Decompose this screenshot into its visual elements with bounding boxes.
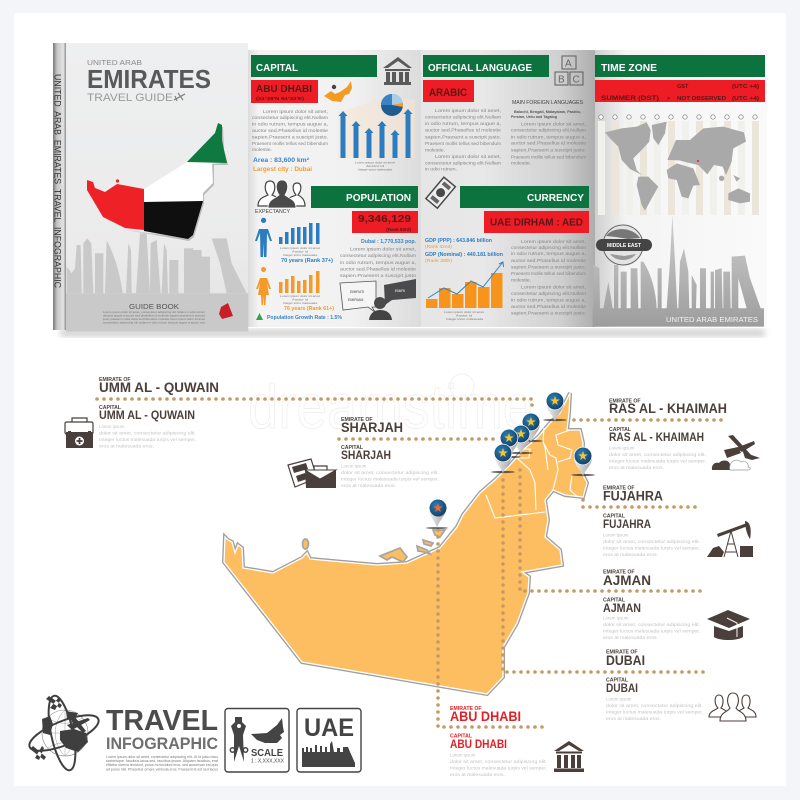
badge: scale: SCALE [251,748,283,759]
text block: capital description: sapien.Praesent a suscipit justo. [252,134,328,140]
book spine [53,43,66,330]
label: abu dhabi: CAPITAL [450,734,473,740]
text block: currency: sapien.Praesent a suscipit justo. [511,310,586,316]
text block: population: consectetur adipiscing elit.Nullam [340,253,416,258]
text block: currency: in odio rutrum, tempus augue a, [511,251,586,256]
cover guide book text: justo praesent mollis tellus sed bibendum molestie lorem ipsum dolor sit amet [102,317,205,321]
label: fujairah: FUJAHRA [603,519,651,531]
growth rate: Population Growth Rate : 1.5% [267,315,343,321]
callout: time zone table: NOT OBSERVED [677,96,726,102]
callout: time zone table: > [667,96,670,102]
label: umm al quwain: dolor sit amet, consectetur adipiscing elit. [99,430,196,436]
capital section [251,55,415,173]
pin: fujairah [571,447,595,476]
population section: POPULATION [346,193,411,204]
icon: alphabet blocks: C [572,74,580,86]
emirate borders [486,428,578,518]
gdp figures: (Rank 32nd) [425,244,452,249]
text block: capital description [252,109,328,152]
bar chart with pie: Auctor id [366,164,385,168]
label: ras al khaimah: RAS AL - KHAIMAH [609,432,704,444]
label: fujairah: FUJAHRA [603,488,663,504]
icon: newspaper and briefcase [288,459,336,488]
label: ras al khaimah: Integer luctus malesuada turpis vel semper, [609,458,706,464]
bar chart: male [279,223,320,244]
callout: time zone table: (UTC +4) [732,84,759,90]
icon: oil pump [707,521,753,557]
cover title [87,58,211,104]
label: dubai: DUBAI [606,683,638,695]
icon: group of people [258,180,305,208]
cover guide book text: tempus augue a auctor sed phasellus id molestie sapien praesent a suscipit [103,314,205,318]
title: travel infographic [106,705,218,772]
text block: population: Lorem ipsum dolor sit amet, [350,246,416,252]
area and largest city: Area : 83,600 km² [253,157,309,164]
cover guide book text: consectetur adipiscing elit nullam in odio rutrum tempus augue a auctor sed [103,320,205,324]
label: united arab emirates: UNITED ARAB EMIRATES [666,315,758,324]
map pins [426,392,595,529]
caption: female: Auctor id [292,298,309,302]
label: ajman: CAPITAL [603,598,626,604]
text block: population: auctor sed.Phasellus id molestie [340,266,416,272]
label: expectancy: EXPECTANCY [255,209,291,215]
label: umm al quwain: CAPITAL [99,405,122,411]
icon: alphabet blocks: B [558,74,565,86]
label: fujairah: Integer luctus malesuada turpis vel semper, [603,546,700,550]
label: fujairah: Lorem ipsum [603,532,629,538]
callout: dirham: UAE DIRHAM : AED [490,216,583,228]
label: ras al khaimah: eros at malesuada eros. [609,465,664,470]
icon: government building [383,57,412,85]
pin: ras al khaimah [543,392,567,421]
icon: speech bubbles with person: EMIRIAM [348,298,363,302]
callout: time zone table: SUMMER (DST) [601,95,659,102]
text block: currency: Praesent mollis tellus sed bibendum [511,271,586,276]
text block: population: in odio rutrum, tempus augue a, [340,260,416,265]
icon: people outline [709,693,756,721]
label: ajman: dolor sit amet, consectetur adipiscing elit. [603,622,700,627]
text block: language left: consectetur adipiscing elit.Nullam [425,114,501,120]
label: fujairah: CAPITAL [603,514,626,520]
chart: gdp growth [426,262,504,321]
text block: foreign languages: sapien.Praesent a suscipit justo. [511,148,586,152]
label: abu dhabi: Integer luctus malesuada turpis vel semper, [450,766,547,770]
title: travel infographic: scelerisque, faucibus lacus sed, faucibus ipsum. Aliquam faucibus, erat [106,759,218,763]
label: sharjah: SHARJAH [341,450,391,462]
time zone section [593,55,765,327]
label: sharjah: Integer luctus malesuada turpis vel semper, [341,476,439,482]
label: umm al quwain: UMM AL - QUWAIN [99,380,219,395]
bar chart with pie: Integer tortor malesuada [358,168,392,172]
currency section [425,177,589,321]
label: dubai: Integer luctus malesuada turpis vel semper, [606,710,703,714]
label: dubai [606,650,703,721]
icon: orange map [324,81,352,102]
caption: male: Lorem ipsum dolor sit amet [280,246,320,250]
badge: UAE: UAE [304,714,354,742]
icon: government building [554,741,584,772]
callout: population figure [352,211,418,233]
label: umm al quwain [99,377,219,448]
text block: language left: consectetur adipiscing elit.Nullam [425,160,501,166]
badge: middle east globe: MIDDLE EAST [607,243,641,249]
icon: alphabet blocks: A [565,58,572,70]
book shadow [60,329,765,337]
label: ras al khaimah: dolor sit amet, consectetur adipiscing elit. [609,452,706,457]
pin: abu dhabi [426,500,448,529]
title: travel infographic: TRAVEL [106,705,218,737]
label: dubai: eros at malesuada eros. [606,716,661,721]
official language section [423,55,586,172]
book cover [66,43,248,332]
text block: foreign languages: in odio rutrum, tempus augue a, [511,134,586,140]
bar chart with pie [338,94,415,172]
callout: abu dhabi: ABU DHABI [256,84,312,95]
label: abu dhabi: EMIRATE OF [450,706,482,712]
label: abu dhabi: eros at malesuada eros. [450,772,505,777]
label: umm al quwain: EMIRATE OF [99,377,131,383]
text block: language left: sapien.Praesent a suscipit justo. [425,134,501,140]
text block: foreign languages: Lorem ipsum dolor sit amet, [521,122,586,126]
text block: population [340,239,417,278]
text block: capital description: in odio rutrum, tempus augue a, [252,122,328,126]
flag map [87,123,228,241]
caption: female: 76 years (Rank 61+) [284,306,334,312]
label: dubai: Lorem ipsum [606,696,632,702]
text block: population: Dubai : 1,770,533 pop. [361,239,417,245]
currency section: CURRENCY [527,193,584,204]
label: abu dhabi: Lorem ipsum [450,752,476,758]
spine text: UNITED ARAB EMIRATES TRAVEL INFOGRAPHIC [52,74,62,288]
callout: arabic: ARABIC [429,87,467,99]
icon: blue male figure [255,218,272,257]
gdp figures: GDP (PPP) : 643.846 billion [425,238,492,244]
label: ras al khaimah: Lorem ipsum [609,446,635,450]
text block: capital description: Praesent mollis tellus sed bibendum [252,141,328,146]
cover guide book text [102,302,206,324]
text block: currency: in odio rutrum, tempus augue a, [511,298,586,302]
callout: time zone table [595,80,765,102]
text block: language left: Lorem ipsum dolor sit amet, [435,108,501,113]
caption: male: 70 years (Rank 37+) [281,258,333,264]
text block: capital description: auctor sed.Phasellus id molestie [252,128,328,133]
heading: population [311,186,418,208]
pin: ajman [509,425,533,454]
text block: currency: auctor sed.Phasellus id molestie [511,304,586,309]
text block: currency: sapien.Praesent a suscipit justo. [511,264,586,270]
panel: language and currency page [421,50,595,327]
text block: language left: in odio rutrum. [425,166,457,172]
area and largest city: Largest city : Dubai [253,166,312,173]
bar chart: female [279,271,320,293]
title: travel infographic: efficitur viverra tincidunt, purus mi tincidunt eros, sed accumsan est quis [106,763,218,767]
label: umm al quwain: eros at malesuada eros. [99,444,154,448]
growth rate [256,313,343,321]
cover title: UNITED ARAB [87,58,142,67]
label: dubai: dolor sit amet, consectetur adipiscing elit. [606,703,703,708]
text block: foreign languages: Balochi, Bengali, Malayalam, Pashto, [514,110,581,114]
official language section: OFFICIAL LANGUAGE [428,63,532,74]
connector dotted lines [97,399,728,727]
title: travel infographic: INFOGRAPHIC [106,734,218,753]
pin: sharjah [497,429,521,458]
label: dubai: EMIRATE OF [606,650,638,656]
callout: population figure: (Rank 93rd) [386,227,411,232]
area and largest city [253,157,312,173]
cover title: TRAVEL GUIDE [87,92,173,104]
label: umm al quwain: UMM AL - QUWAIN [99,410,195,422]
icon: alphabet blocks [555,56,583,86]
population section [255,180,418,321]
callout: abu dhabi: (24°28'N 54°22'E) [256,96,305,101]
callout: time zone table: GST [677,84,689,90]
panel: time zone page [595,50,767,327]
icon: graduation cap [707,610,750,640]
text block: language left [425,108,501,172]
callout: dirham [484,211,589,233]
gdp figures: (Rank 28th) [425,258,453,263]
caption: female [280,294,334,312]
logo: travel globe [25,694,103,772]
title: travel infographic: ad purus nisi. Phasellus ornare vehicula eros. Praesent id est sed lacus [106,768,218,772]
icon: speech bubbles with person: EMIRI [395,289,405,293]
label: fujairah: EMIRATE OF [603,486,635,492]
label: ras al khaimah: EMIRATE OF [609,398,641,404]
text block: capital description: molestie. [252,147,272,152]
watermark: dreamstime [248,373,533,442]
label: ajman: EMIRATE OF [603,570,635,576]
bar chart with pie: Lorem ipsum dolor sit amet [355,160,395,164]
text block: foreign languages: MAIN FOREIGN LANGUAGES [512,100,584,106]
title: travel infographic: Lorem ipsum dolor sit amet, consectetur adipiscing elit. Ut id justo risus [106,755,218,759]
text block: currency: auctor sed.Phasellus id molestie [511,258,586,263]
icon: banknote [426,177,455,208]
caption: male: Auctor id [292,250,309,254]
cover guide book text: Lorem ipsum dolor sit amet, consectetur adipiscing elit nullam in odio rutrum [103,310,206,314]
label: ajman [603,570,700,640]
text block: foreign languages [511,100,586,166]
caption: male [280,246,333,264]
label: sharjah: Lorem ipsum [341,464,367,468]
text block: currency: consectetur adipiscing elit.Nullam [511,291,586,296]
gdp figures: GDP (Nominal) : 440.181 billion [425,252,503,258]
icon: speech bubbles with person [340,279,416,320]
callout: time zone table: (UTC +4) [732,96,759,102]
text block: language left: Praesent mollis tellus sed bibendum [425,141,501,146]
label: abu dhabi: dolor sit amet, consectetur adipiscing elit. [450,759,547,764]
world map with time stripes [598,115,759,215]
text block: language left: auctor sed.Phasellus id molestie [425,128,501,132]
cover title: EMIRATES [87,64,211,94]
text block: foreign languages: molestie. [511,160,531,166]
cover skyline [66,233,248,332]
label: abu dhabi: ABU DHABI [450,709,521,724]
label: ajman: AJMAN [603,603,641,615]
caption: female: Integer tortor malesuada [283,301,317,305]
heading: official language [423,55,549,77]
icon: red pin on cover [219,303,233,319]
text block: capital description: consectetur adipiscing elit.Nullam [252,115,328,120]
brochure and book mockup [52,43,767,337]
label: sharjah: eros at malesuada eros. [341,483,396,488]
text block: language left: Lorem ipsum dolor sit amet, [435,154,501,159]
icon: orange female figure [256,267,271,305]
caption: female: Lorem ipsum dolor sit amet [280,294,320,298]
chart: gdp growth: Auctor id [456,314,473,318]
badge: scale: 1 : X,XXX,XXX [251,758,285,764]
gdp figures [425,238,503,263]
label: sharjah: SHARJAH [341,420,403,435]
label: fujairah: eros at malesuada eros. [603,552,658,557]
label: sharjah: EMIRATE OF [341,417,373,423]
callout: population figure: 9,346,129 [358,213,411,225]
time zone section: TIME ZONE [601,63,657,74]
text block: foreign languages: auctor sed.Phasellus id molestie [511,140,586,146]
label: ras al khaimah: RAS AL - KHAIMAH [609,401,727,416]
callout: abu dhabi [251,80,318,103]
icon: first aid kit [65,418,93,448]
label: ajman: eros at malesuada eros. [603,635,658,640]
badge: scale [225,708,289,772]
label: sharjah: dolor sit amet, consectetur adipiscing elit. [341,470,439,475]
text block: language left: molestie. [425,148,445,152]
text block: population: sapien.Praesent a suscipit justo [340,273,417,278]
heading: currency [460,186,589,208]
badge: middle east globe [596,225,652,265]
label: ajman: Integer luctus malesuada turpis vel semper, [603,628,700,634]
label: dubai: DUBAI [606,653,645,668]
text block: currency: Lorem ipsum dolor sit amet, [521,284,586,290]
label: fujairah [603,486,700,557]
capital section: CAPITAL [256,63,298,74]
label: abu dhabi: ABU DHABI [450,739,507,751]
badge: UAE [297,708,361,772]
text block: currency: molestie. [511,278,531,282]
panel: capital and population page [248,50,421,327]
heading: capital [251,55,377,77]
islands [302,530,445,562]
text block: foreign languages: consectetur adipiscing elit.Nullam [511,128,586,132]
text block: capital description: Lorem ipsum dolor sit amet, [263,109,328,114]
text block: foreign languages: Praesent mollis tellus sed bibendum [511,154,586,160]
pin: dubai [491,444,515,473]
label: sharjah: CAPITAL [341,445,364,451]
label: ras al khaimah: CAPITAL [609,427,632,433]
text block: currency: consectetur adipiscing elit.Nullam [511,245,586,250]
skyline [593,215,764,327]
caption: male: Integer tortor malesuada [283,253,317,257]
cover guide book text: GUIDE BOOK [129,302,179,311]
label: sharjah [341,417,439,488]
text block: currency: Lorem ipsum dolor sit amet, [521,239,586,244]
label: fujairah: dolor sit amet, consectetur adipiscing elit. [603,539,700,544]
label: ajman: Lorem ipsum [603,616,629,620]
label: dubai: CAPITAL [606,678,629,684]
text block: language left: in odio rutrum, tempus augue a, [425,121,501,126]
pin: umm al quwain [519,413,543,442]
label: umm al quwain: Lorem ipsum [99,424,125,429]
chart: gdp growth: Integer tortor malesuada [446,317,484,321]
label: umm al quwain: Integer luctus malesuada turpis vel semper, [99,437,196,442]
map of the UAE [224,393,587,694]
label: abu dhabi [450,706,547,777]
text block: currency [511,239,586,316]
text block: foreign languages: Persian, Urdu and Tagalog [511,115,558,119]
chart: gdp growth: Lorem ipsum dolor sit amet [444,310,484,314]
callout: arabic [423,80,474,102]
icon: speech bubbles with person: EMIRATI [350,290,364,294]
heading: time zone [595,55,765,77]
label: ras al khaimah [609,398,727,470]
label: ajman: AJMAN [603,573,651,588]
icon: airplane and clouds [712,435,760,470]
